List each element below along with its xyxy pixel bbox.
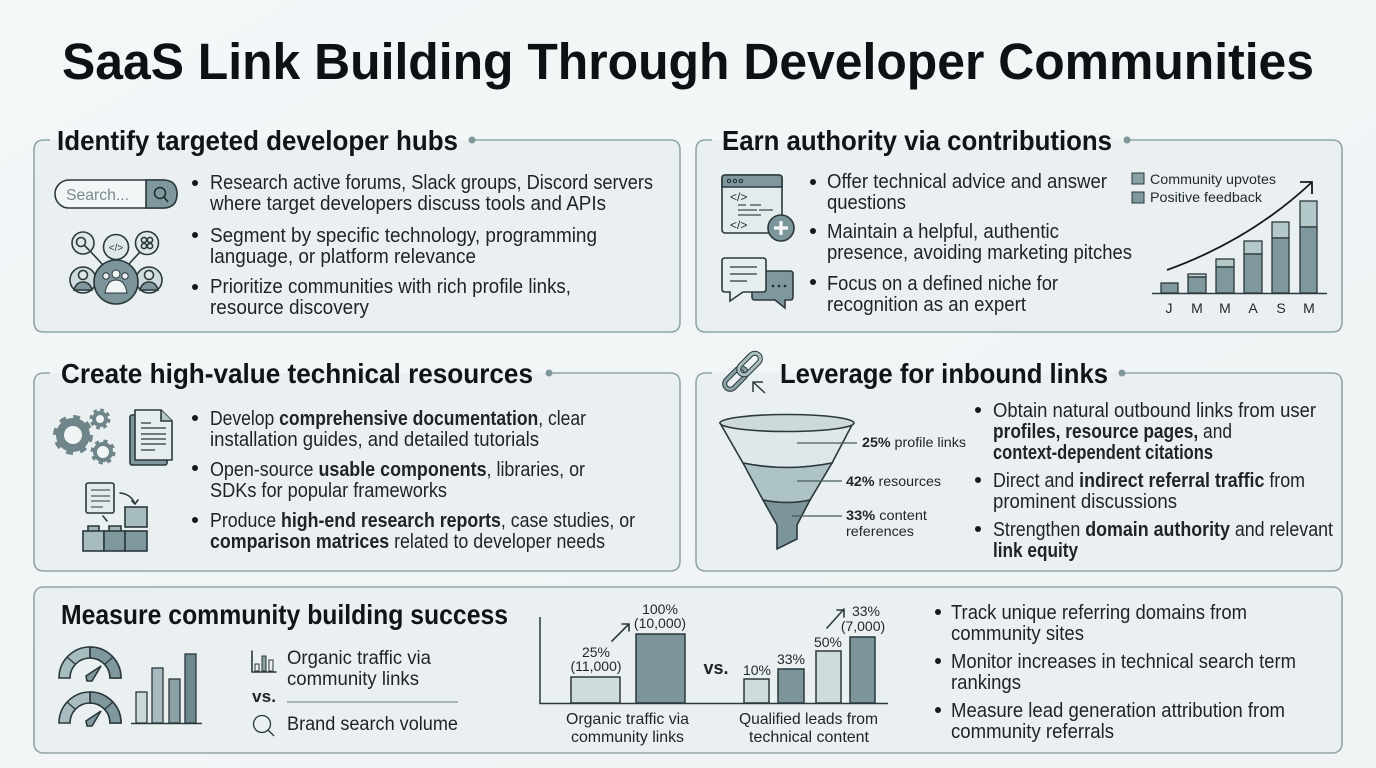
icon: community hub xyxy=(70,232,162,304)
bullet list: measure: community referrals xyxy=(951,721,1114,743)
bullet list: leverage: Obtain natural outbound links from user xyxy=(993,400,1316,422)
bullet list: identify: Prioritize communities with rich profile links, xyxy=(210,276,571,298)
icon: code window xyxy=(722,175,794,241)
comparison bar chart: 25% xyxy=(582,644,610,660)
bullet list: identify: where target developers discuss tools and APIs xyxy=(209,193,606,215)
comparison bar chart: 50% xyxy=(814,634,842,650)
funnel chart: 42% resources xyxy=(846,473,941,489)
bullet list: identify: Segment by specific technology, programming xyxy=(210,225,597,247)
comparison bar chart: vs. xyxy=(703,658,729,678)
stacked bar chart xyxy=(1152,182,1327,316)
bullet list: create resources xyxy=(192,408,635,553)
metric comparison xyxy=(252,648,458,736)
bullet list: earn authority: Offer technical advice and answer xyxy=(827,171,1107,193)
metric comparison: Brand search volume xyxy=(287,714,458,735)
bullet list: leverage: Strengthen domain authority and relevant xyxy=(993,519,1333,541)
comparison bar chart xyxy=(540,601,888,746)
comparison bar chart: Qualified leads from xyxy=(739,711,878,728)
icon: document xyxy=(130,410,172,465)
comparison bar chart: (7,000) xyxy=(841,618,885,634)
icon: search bar: Search... xyxy=(66,187,129,204)
stacked bar chart: M xyxy=(1303,300,1315,316)
bullet list: leverage: profiles, resource pages, and xyxy=(993,421,1232,443)
stacked bar chart: M xyxy=(1219,300,1231,316)
comparison bar chart: 33% xyxy=(852,603,880,619)
panel: identify targeted developer hubs xyxy=(34,125,680,332)
comparison bar chart: technical content xyxy=(749,729,870,746)
bullet list: identify: Research active forums, Slack groups, Discord servers xyxy=(210,172,653,194)
bullet list: create resources: installation guides, and detailed tutorials xyxy=(210,429,539,451)
bullet list: leverage: Direct and indirect referral traffic from xyxy=(993,470,1305,492)
icon: search bar xyxy=(55,180,177,208)
bullet list: leverage: context-dependent citations xyxy=(993,442,1213,464)
bullet list: measure: Measure lead generation attribution from xyxy=(951,700,1285,722)
heading: create resources: Create high-value technical resources xyxy=(61,358,533,389)
stacked bar chart: J xyxy=(1166,300,1172,316)
bullet list: leverage: prominent discussions xyxy=(993,491,1177,513)
icon: gears xyxy=(56,410,114,462)
metric comparison: Organic traffic via xyxy=(287,648,431,669)
bullet list: earn authority: questions xyxy=(827,192,906,214)
chart legend xyxy=(1132,171,1276,205)
heading: leverage: Leverage for inbound links xyxy=(780,358,1108,389)
bullet list: create resources: comparison matrices related to developer needs xyxy=(210,531,605,553)
comparison bar chart: (10,000) xyxy=(634,615,686,631)
heading: identify: Identify targeted developer hubs xyxy=(57,125,458,156)
panel: create high-value technical resources xyxy=(34,358,680,571)
bullet list: leverage xyxy=(975,400,1333,562)
bullet list: earn authority: Focus on a defined niche for xyxy=(827,273,1058,295)
chart legend: Community upvotes xyxy=(1150,171,1276,187)
icon: gauges xyxy=(59,647,121,726)
bullet list: measure xyxy=(935,602,1296,743)
funnel chart: 25% profile links xyxy=(862,434,966,450)
comparison bar chart: Organic traffic via xyxy=(566,711,689,728)
panel: measure community building success xyxy=(34,587,1342,753)
stacked bar chart: A xyxy=(1248,300,1258,316)
funnel chart xyxy=(720,414,966,549)
bullet list: earn authority xyxy=(810,171,1132,316)
comparison bar chart: 33% xyxy=(777,651,805,667)
bullet list: measure: community sites xyxy=(951,623,1084,645)
bullet list: earn authority: recognition as an expert xyxy=(827,294,1026,316)
stacked bar chart: S xyxy=(1276,300,1286,316)
icon: chat bubbles xyxy=(722,258,793,308)
bullet list: measure: Monitor increases in technical search term xyxy=(951,651,1296,673)
bullet list: earn authority: presence, avoiding marketing pitches xyxy=(827,242,1132,264)
icon: chain link xyxy=(722,351,765,393)
stacked bar chart: M xyxy=(1191,300,1203,316)
metric comparison: community links xyxy=(287,669,419,690)
funnel chart: 33% content xyxy=(846,507,927,523)
bullet list: create resources: Develop comprehensive documentation, clear xyxy=(210,408,586,430)
icon: community hub: </> xyxy=(109,243,123,254)
panel: leverage for inbound links xyxy=(696,351,1342,571)
bullet list: identify: language, or platform relevance xyxy=(210,246,476,268)
icon: code window: </> xyxy=(730,218,747,232)
chart legend: Positive feedback xyxy=(1150,189,1263,205)
icon: small bar chart xyxy=(131,654,202,724)
panel: earn authority via contributions xyxy=(696,125,1342,332)
comparison bar chart: (11,000) xyxy=(570,658,622,674)
bullet list: create resources: Produce high-end research reports, case studies, or xyxy=(210,510,635,532)
icon: building blocks xyxy=(83,483,147,551)
comparison bar chart: 10% xyxy=(743,662,771,678)
bullet list: measure: Track unique referring domains from xyxy=(951,602,1247,624)
heading: earn authority: Earn authority via contributions xyxy=(722,125,1112,156)
comparison bar chart: 100% xyxy=(642,601,678,617)
bullet list: create resources: Open-source usable components, libraries, or xyxy=(210,459,585,481)
heading: measure: Measure community building success xyxy=(61,599,508,630)
icon: code window: </> xyxy=(730,190,747,204)
title: SaaS Link Building Through Developer Communities xyxy=(62,33,1314,90)
bullet list: create resources: SDKs for popular frameworks xyxy=(210,480,447,502)
funnel chart: references xyxy=(846,523,914,539)
metric comparison: vs. xyxy=(252,687,276,706)
bullet list: identify xyxy=(192,172,653,319)
bullet list: identify: resource discovery xyxy=(210,297,369,319)
comparison bar chart: community links xyxy=(571,729,684,746)
bullet list: earn authority: Maintain a helpful, authentic xyxy=(827,221,1059,243)
bullet list: leverage: link equity xyxy=(993,540,1079,562)
bullet list: measure: rankings xyxy=(951,672,1021,694)
